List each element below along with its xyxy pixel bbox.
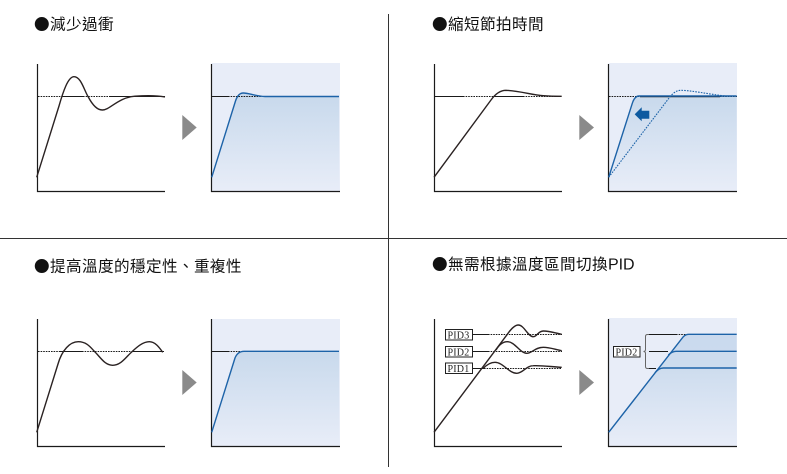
chart: before, overshoot [37, 64, 165, 192]
heading: shorten takt time: ●縮短節拍時間 [432, 12, 544, 34]
arrow: before to after [182, 115, 197, 140]
panel: switch PID by temperature zone [432, 252, 737, 446]
chart: after, reduced overshoot [212, 63, 340, 192]
heading: improve temperature stability: ●提高溫度的穩定性、重複性 [34, 254, 242, 276]
chart: after, fast rise [608, 63, 737, 192]
label: PID3: PID3 [448, 330, 469, 342]
arrow: before to after [579, 370, 594, 395]
chart: before, oscillation [37, 319, 165, 446]
label: PID2: PID2 [448, 348, 469, 358]
chart: before, three PID sets [434, 319, 562, 446]
chart: after, single PID [608, 318, 737, 446]
icon: bracket [644, 334, 649, 368]
label: PID2: PID2 [616, 348, 637, 358]
label: PID1: PID1 [448, 364, 469, 375]
heading: reduce overshoot: ●減少過衝 [34, 12, 114, 34]
panel: reduce overshoot [34, 12, 340, 192]
arrow: before to after [182, 370, 197, 395]
icon: left arrow [635, 107, 649, 121]
chart: before, slow rise [434, 64, 562, 192]
panel: improve temperature stability [34, 254, 340, 446]
chart: after, stable [212, 319, 340, 446]
arrow: before to after [579, 115, 594, 140]
heading: switch PID by temperature zone: ●無需根據溫度區間切換PID [432, 252, 635, 274]
panel: shorten takt time [432, 12, 737, 192]
